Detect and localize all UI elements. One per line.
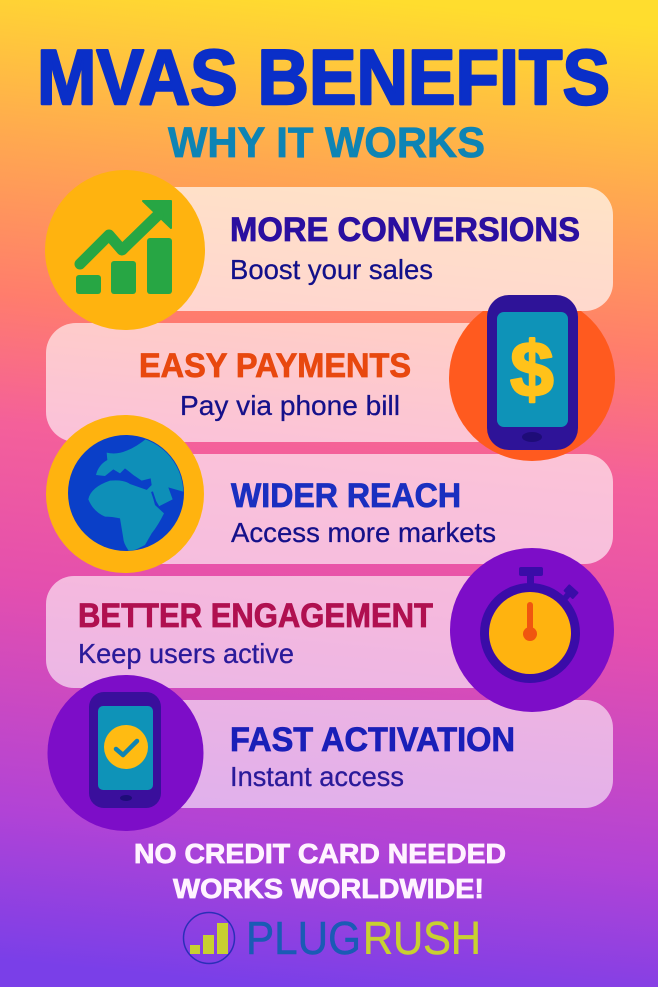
subtitle: WHY IT WORKS [168, 119, 485, 167]
logo: plugrush [184, 912, 481, 964]
footer text: NO CREDIT CARD NEEDED [134, 838, 506, 869]
logo: plugrush: RUSH [363, 912, 481, 964]
icon: stopwatch [450, 548, 614, 712]
panel: wider reach [100, 454, 613, 564]
icon: growth chart [45, 170, 205, 330]
footer text [134, 838, 506, 904]
panel: more conversions [100, 187, 613, 311]
heading: wider reach: WIDER REACH [231, 477, 461, 515]
icon: globe [46, 415, 204, 573]
heading: better engagement: BETTER ENGAGEMENT [78, 597, 433, 635]
text: pay via phone bill: Pay via phone bill [180, 390, 400, 421]
footer text: WORKS WORLDWIDE! [173, 873, 484, 904]
heading: fast activation: FAST ACTIVATION [230, 721, 515, 759]
logo: plugrush: PLUG [246, 912, 361, 964]
title: MVAS BENEFITS [37, 33, 610, 121]
heading: easy payments: EASY PAYMENTS [139, 347, 411, 385]
text: keep users active: Keep users active [78, 638, 294, 669]
panel: easy payments [46, 323, 546, 442]
text: instant access: Instant access [230, 761, 404, 792]
icon: phone with dollar [449, 295, 615, 461]
icon: phone with check [48, 675, 204, 831]
text: access more markets: Access more markets [231, 517, 496, 548]
panel: fast activation [100, 700, 613, 808]
dollar sign: $ [510, 325, 554, 413]
text: boost your sales: Boost your sales [230, 254, 433, 285]
panel: better engagement [46, 576, 546, 688]
heading: more conversions: MORE CONVERSIONS [230, 211, 580, 249]
